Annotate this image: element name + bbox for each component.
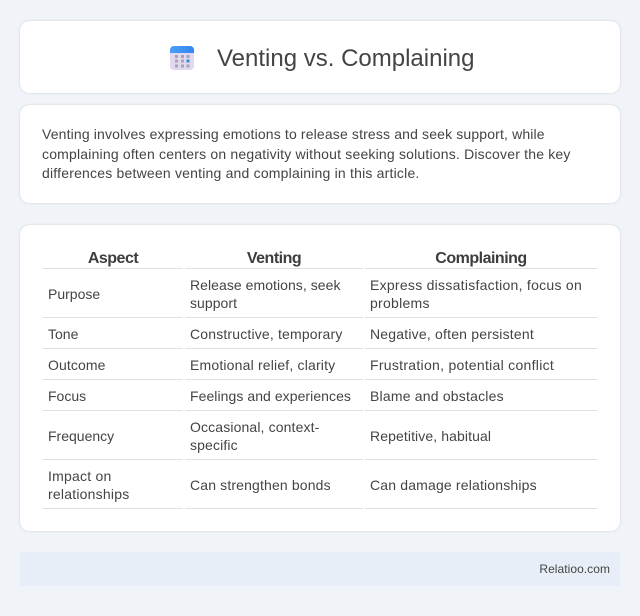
- Focus venting: Feelings and experiences: [190, 388, 351, 404]
- Tone venting: Constructive, temporary: [190, 326, 343, 342]
- Purpose venting: support: [190, 295, 237, 311]
- Purpose complaining: [370, 277, 582, 311]
- header: Aspect: Aspect: [88, 250, 138, 267]
- intro text: [42, 126, 571, 181]
- table card: [20, 225, 620, 531]
- title card: [20, 21, 620, 93]
- row: Purpose: Purpose: [48, 286, 100, 302]
- footer bar: [20, 552, 620, 586]
- Outcome complaining: Frustration, potential conflict: [370, 357, 554, 373]
- Frequency venting: [190, 419, 319, 453]
- Frequency venting: specific: [190, 437, 238, 453]
- Frequency complaining: Repetitive, habitual: [370, 428, 491, 444]
- row: Tone: Tone: [48, 326, 78, 342]
- Impact complaining: Can damage relationships: [370, 477, 537, 493]
- row: Outcome: Outcome: [48, 357, 106, 373]
- Purpose venting: [190, 277, 341, 311]
- Purpose venting: Release emotions, seek: [190, 277, 341, 293]
- Purpose complaining: Express dissatisfaction, focus on: [370, 277, 582, 293]
- header: Venting: Venting: [247, 250, 301, 267]
- intro card: [20, 105, 620, 203]
- intro text: Venting involves expressing emotions to release stress and seek support, while: [42, 126, 545, 142]
- Tone complaining: Negative, often persistent: [370, 326, 534, 342]
- header: Complaining: Complaining: [435, 250, 527, 267]
- row: Impact on relationships: [48, 468, 129, 502]
- footer text: Relatioo.com: [539, 562, 610, 576]
- icon: calendar: [170, 46, 194, 70]
- intro text: complaining often centers on negativity without seeking solutions. Discover the key: [42, 146, 571, 162]
- intro text: differences between venting and complaining in this article.: [42, 165, 420, 181]
- title: Venting vs. Complaining: [217, 45, 474, 72]
- Focus complaining: Blame and obstacles: [370, 388, 504, 404]
- Frequency venting: Occasional, context-: [190, 419, 319, 435]
- row: Focus: Focus: [48, 388, 86, 404]
- row: Impact on relationships: Impact on: [48, 468, 111, 484]
- row: Frequency: Frequency: [48, 428, 114, 444]
- Outcome venting: Emotional relief, clarity: [190, 357, 335, 373]
- Purpose complaining: problems: [370, 295, 430, 311]
- row: Impact on relationships: relationships: [48, 486, 129, 502]
- Impact venting: Can strengthen bonds: [190, 477, 331, 493]
